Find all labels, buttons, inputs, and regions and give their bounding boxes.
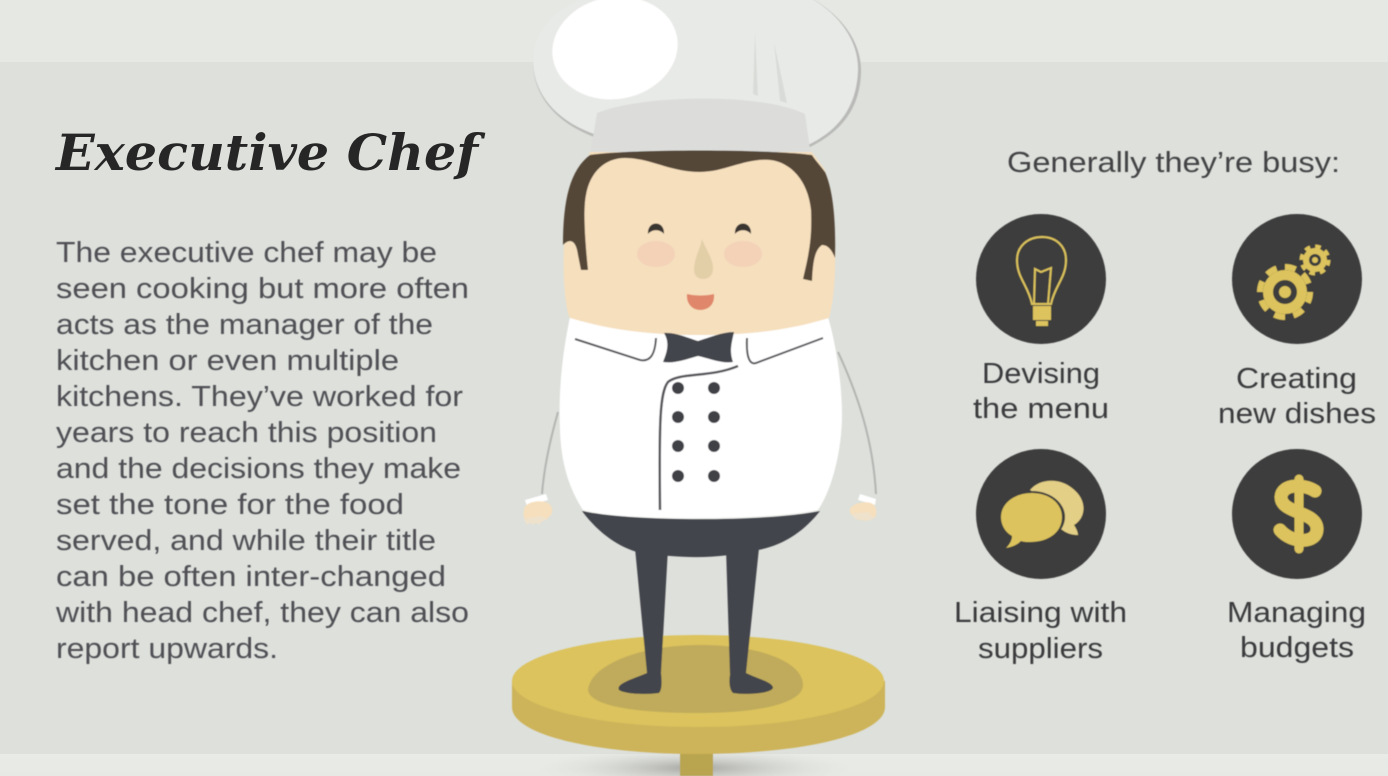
platform [512, 635, 885, 776]
task: managing budgets: budgets [1240, 632, 1354, 664]
description text block: and the decisions they make [56, 453, 461, 485]
icon: light bulb [1017, 237, 1066, 326]
task: creating new dishes [1218, 214, 1376, 430]
mouth [687, 294, 714, 310]
arms [542, 352, 876, 494]
icon: dollar sign [1280, 479, 1317, 549]
head [563, 150, 835, 335]
description text block: acts as the manager of the [56, 309, 433, 341]
bow tie [663, 332, 734, 362]
description text block [55, 237, 469, 665]
description text block: can be often inter-changed [56, 561, 446, 593]
description text block: kitchens. They’ve worked for [56, 381, 463, 413]
task: liaising with suppliers [954, 449, 1127, 665]
jacket [560, 317, 842, 518]
icon: gears [1260, 246, 1328, 317]
description text block: kitchen or even multiple [56, 345, 399, 377]
cheeks [637, 241, 675, 267]
hands [523, 494, 876, 525]
task: managing budgets [1227, 449, 1366, 664]
task: devising the menu [973, 214, 1109, 425]
task: managing budgets: Managing [1227, 597, 1366, 629]
icon: speech bubbles [999, 481, 1084, 548]
eyes [648, 224, 664, 234]
description text block: years to reach this position [56, 417, 437, 449]
legs and trousers [582, 511, 820, 694]
description text block: seen cooking but more often [56, 273, 469, 305]
description text block: The executive chef may be [56, 237, 437, 269]
description text block: report upwards. [56, 633, 278, 665]
task: liaising with suppliers: Liaising with [954, 597, 1127, 629]
description text block: set the tone for the food [56, 489, 404, 521]
nose [694, 239, 713, 279]
panel heading: Generally they’re busy: [1007, 147, 1340, 179]
task: devising the menu: Devising [982, 358, 1100, 390]
task: liaising with suppliers: suppliers [978, 633, 1103, 665]
buttons [672, 382, 720, 482]
title: Executive Chef [54, 123, 486, 182]
task: devising the menu: the menu [973, 393, 1109, 425]
description text block: served, and while their title [56, 525, 436, 557]
task: creating new dishes: new dishes [1218, 398, 1376, 430]
task: creating new dishes: Creating [1236, 363, 1357, 395]
description text block: with head chef, they can also [55, 597, 469, 629]
hat [533, 0, 861, 156]
illustration: chef on platform [512, 0, 885, 776]
